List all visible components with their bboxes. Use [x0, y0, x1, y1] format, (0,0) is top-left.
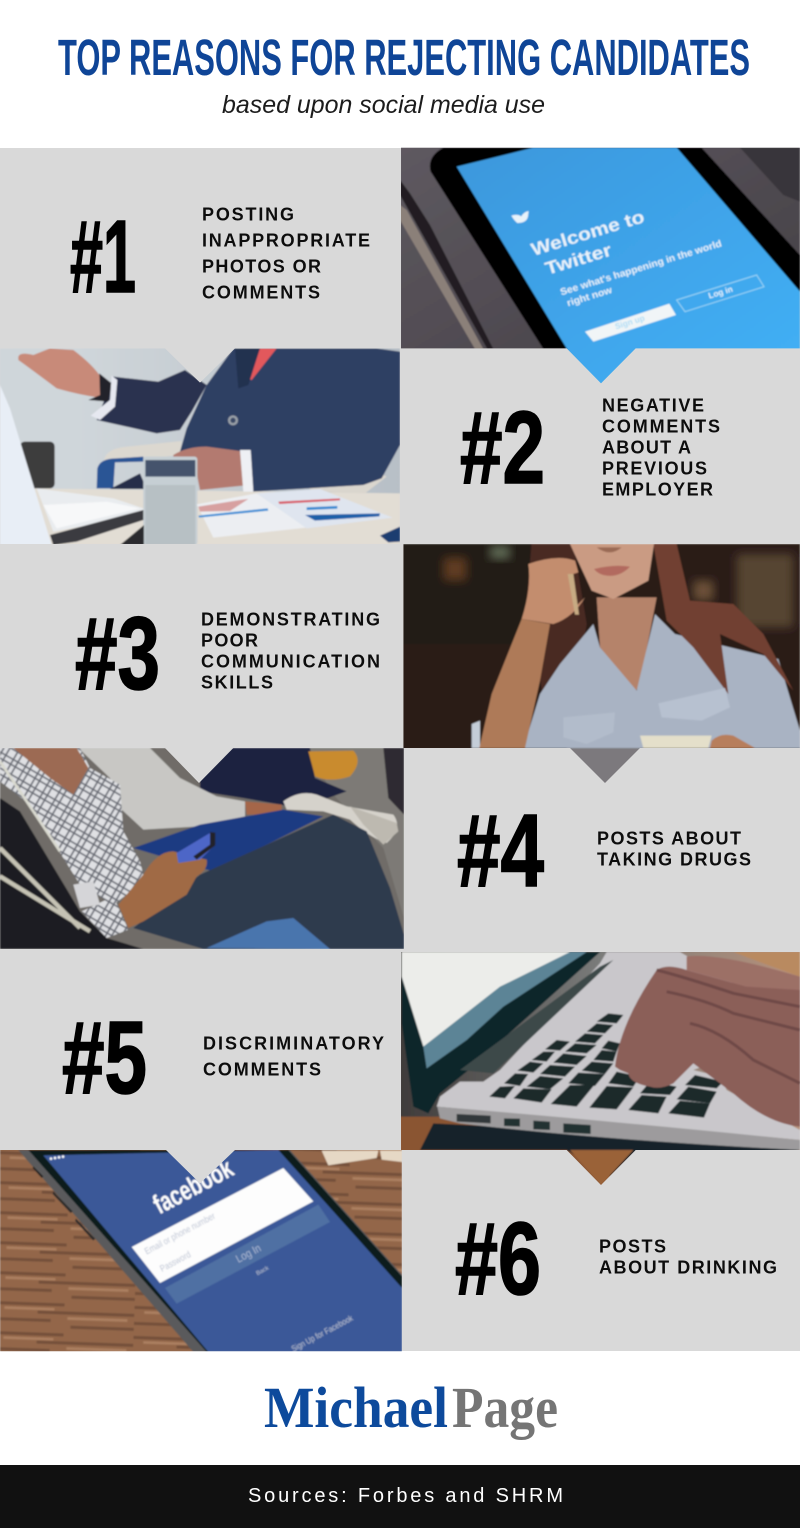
twitter screen text: See what's happening in the world	[559, 238, 723, 298]
photo: twitter phone	[400, 145, 800, 385]
facebook login form text: Log In	[234, 1243, 263, 1266]
photo: businessman at desk	[0, 345, 400, 545]
panel: reason 4	[457, 793, 751, 908]
reason 1 text: PHOTOS OR	[202, 256, 321, 276]
twitter screen text: Welcome to	[529, 206, 647, 260]
twitter screen text: right now	[566, 285, 614, 309]
twitter screen text: Twitter	[543, 240, 614, 279]
reason 3 text: SKILLS	[201, 672, 273, 692]
photo: twitter phone: Log in	[707, 284, 734, 301]
facebook login form text: Back	[255, 1266, 270, 1277]
photo: woman on the phone	[400, 544, 800, 785]
footer bar	[0, 1465, 800, 1528]
reason 5 text: DISCRIMINATORY	[203, 1034, 384, 1054]
sources text: Sources: Forbes and SHRM	[248, 1485, 563, 1507]
photo: facebook phone on wood table	[0, 1148, 402, 1354]
logo: Michael Page	[264, 1375, 558, 1440]
reason 2 text	[602, 396, 720, 500]
gray panels background	[0, 148, 800, 1351]
reason 2 text: ABOUT A	[602, 438, 691, 458]
photo: hands typing on laptop	[400, 950, 800, 1190]
reason 1 text	[202, 204, 370, 302]
photo: twitter phone: Sign up	[614, 313, 646, 331]
reason 2 text: COMMENTS	[602, 416, 720, 436]
reason 4 text: TAKING DRUGS	[597, 850, 751, 870]
logo: Michael Page: Michael	[264, 1375, 448, 1440]
panel: reason 2	[460, 390, 720, 505]
reason 3 text: POOR	[201, 630, 258, 650]
logo: Michael Page: Page	[452, 1375, 558, 1440]
reason 5 text: COMMENTS	[203, 1060, 321, 1080]
number 5: #5	[62, 1000, 147, 1115]
subtitle: based upon social media use	[222, 91, 545, 119]
facebook login form text: Password	[158, 1249, 192, 1274]
reason 6 text: ABOUT DRINKING	[599, 1258, 777, 1278]
number 4: #4	[457, 793, 544, 908]
reason 3 text	[201, 610, 380, 692]
panel: reason 1	[70, 199, 370, 314]
reason 1 text: INAPPROPRIATE	[202, 230, 370, 250]
facebook login form text: Sign Up for Facebook	[290, 1313, 355, 1354]
reason 2 text: NEGATIVE	[602, 396, 704, 416]
reason 2 text: EMPLOYER	[602, 480, 713, 500]
number 2: #2	[460, 390, 545, 505]
number 3: #3	[75, 596, 160, 711]
twitter bird icon	[511, 211, 529, 223]
facebook login form text: Email or phone number	[143, 1211, 217, 1256]
photo: man using phone on lap	[0, 748, 404, 949]
facebook wordmark: facebook	[148, 1152, 239, 1220]
panel: reason 5	[62, 1000, 384, 1115]
reason 3 text: DEMONSTRATING	[201, 610, 380, 630]
twitter screen text	[529, 206, 723, 309]
number 1: #1	[70, 199, 136, 314]
reason 3 text: COMMUNICATION	[201, 652, 380, 672]
reason 5 text	[203, 1034, 384, 1080]
number 6: #6	[455, 1201, 541, 1316]
reason 4 text	[597, 828, 751, 870]
reason 6 text	[599, 1236, 777, 1278]
reason 6 text: POSTS	[599, 1236, 666, 1256]
panel: reason 6	[455, 1201, 777, 1316]
reason 2 text: PREVIOUS	[602, 458, 707, 478]
reason 4 text: POSTS ABOUT	[597, 828, 741, 848]
facebook login form text	[143, 1211, 355, 1354]
reason 1 text: POSTING	[202, 204, 294, 224]
panel: reason 3	[75, 596, 380, 711]
reason 1 text: COMMENTS	[202, 282, 320, 302]
